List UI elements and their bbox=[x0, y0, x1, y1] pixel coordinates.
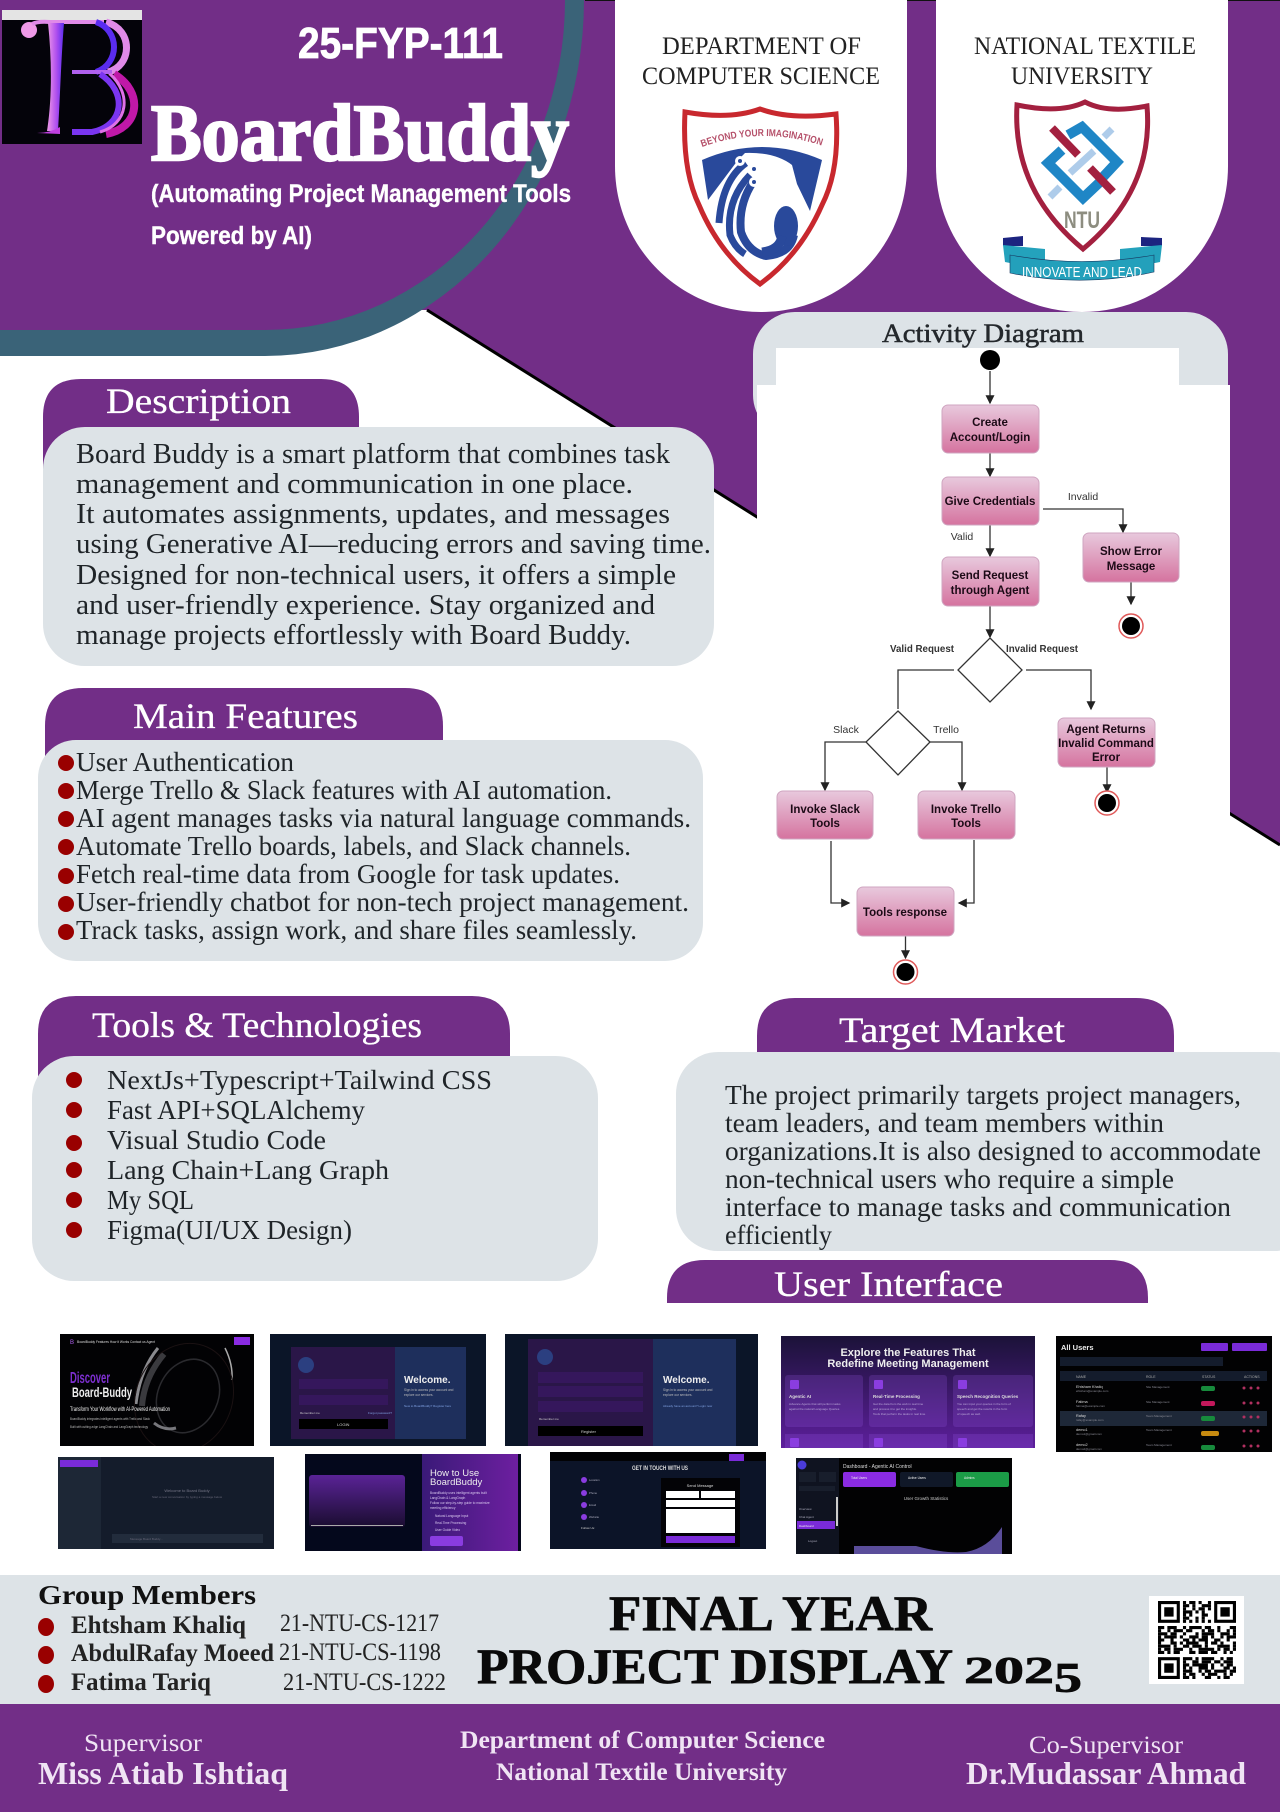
feature list bbox=[76, 747, 691, 945]
panel: university crest arch bbox=[936, 0, 1228, 312]
screenshot: dashboard: Active Users bbox=[908, 1476, 926, 1480]
screenshot: users table: NAME bbox=[1076, 1375, 1087, 1379]
box: show error: Show Error bbox=[1100, 546, 1163, 558]
screenshot: users table: All Users bbox=[1061, 1343, 1094, 1352]
screenshot: users table: Site Management bbox=[1146, 1385, 1170, 1389]
member names: Fatima Tariq bbox=[71, 1669, 211, 1696]
band: group members and display title bbox=[0, 1575, 1280, 1704]
feature list: User Authentication bbox=[76, 747, 294, 777]
screenshot: contact page: GET IN TOUCH WITH US bbox=[632, 1466, 688, 1472]
feature list: Track tasks, assign work, and share files seamlessly. bbox=[76, 915, 637, 945]
description text: Board Buddy is a smart platform that combines task bbox=[76, 438, 670, 470]
feature list: Automate Trello boards, labels, and Slack channels. bbox=[76, 831, 631, 861]
box: show error bbox=[1083, 533, 1179, 582]
screenshot: login page: Remember me bbox=[300, 1411, 320, 1415]
screenshot: login page: LOGIN bbox=[337, 1422, 350, 1427]
header background: purple diagonal shape bbox=[0, 0, 1280, 845]
description text: using Generative AI—reducing errors and saving time. bbox=[76, 528, 711, 560]
screenshot: dashboard bbox=[796, 1458, 1012, 1554]
screenshot: login page bbox=[270, 1334, 486, 1446]
screenshot: users table: demo2@gmail.com bbox=[1076, 1447, 1102, 1451]
icon: NTU shield and ribbon: INNOVATE AND LEAD bbox=[1022, 264, 1142, 281]
screenshot: features page: speech and get the results in the form bbox=[957, 1407, 1008, 1411]
screenshot: features page: against the natural Language Queries. bbox=[789, 1407, 840, 1411]
screenshot: how-to page: How to Use bbox=[430, 1468, 479, 1479]
screenshot: features page: Tools that perform the tasks in real time bbox=[873, 1412, 926, 1416]
decision: tool bbox=[866, 711, 930, 775]
decision: request bbox=[958, 638, 1022, 702]
supervisor bbox=[38, 1730, 288, 1791]
co-supervisor bbox=[966, 1732, 1246, 1791]
screenshot: how-to page: Natural Language Input bbox=[435, 1514, 468, 1518]
panel: user interface heading tab bbox=[667, 1260, 1148, 1304]
university heading: NATIONAL TEXTILE bbox=[974, 33, 1196, 60]
heading: main features: Main Features bbox=[133, 696, 358, 736]
department and university bbox=[460, 1727, 825, 1786]
department and university: Department of Computer Science bbox=[460, 1727, 825, 1754]
screenshot: users table: rafay@example.com bbox=[1076, 1418, 1104, 1422]
screenshot: register page: Sign in to access your account and bbox=[663, 1388, 713, 1392]
box: invoke slack bbox=[777, 791, 873, 839]
panel: department crest arch bbox=[615, 0, 907, 312]
member ids: 21-NTU-CS-1217 bbox=[280, 1610, 439, 1637]
screenshot: users table: Rafay bbox=[1076, 1414, 1086, 1418]
branch labels bbox=[833, 491, 1098, 736]
branch labels: Invalid bbox=[1068, 491, 1098, 503]
screenshot: register page: explore our services. bbox=[663, 1393, 693, 1397]
supervisor: Supervisor bbox=[84, 1730, 203, 1757]
tools list: Fast API+SQLAlchemy bbox=[107, 1095, 365, 1125]
tools bullets bbox=[66, 1072, 82, 1238]
screenshot: landing page: BoardBuddy integrates intelligent agents with Trello and Slack bbox=[70, 1416, 150, 1421]
description text: Designed for non-technical users, it offers a simple bbox=[76, 559, 676, 591]
screenshot: features page: and process it to get the insights. bbox=[873, 1407, 917, 1411]
screenshot: dashboard: Dashboard - Agentic AI Control bbox=[843, 1464, 912, 1470]
description text: and user-friendly experience. Stay organized and bbox=[76, 589, 656, 621]
screenshot: dashboard: Dashboard bbox=[799, 1524, 814, 1528]
member ids: 21-NTU-CS-1198 bbox=[279, 1639, 441, 1666]
branch labels: Slack bbox=[833, 724, 860, 736]
subtitle bbox=[151, 180, 571, 250]
co-supervisor: Dr.Mudassar Ahmad bbox=[966, 1755, 1246, 1791]
target market text: organizations.It is also designed to accommodate bbox=[725, 1136, 1261, 1166]
box: create account bbox=[942, 405, 1039, 453]
box: agent returns bbox=[1058, 718, 1155, 767]
heading: description: Description bbox=[106, 381, 291, 421]
branch labels: Valid Request bbox=[890, 643, 954, 655]
screenshot: dashboard: Overview bbox=[799, 1507, 812, 1511]
start node bbox=[980, 350, 1000, 370]
heading: target market: Target Market bbox=[839, 1010, 1065, 1050]
screenshot: features page: Advance Agents that will perform tasks bbox=[789, 1402, 841, 1406]
box: tools response: Tools response bbox=[863, 907, 947, 919]
panel: description bbox=[43, 379, 714, 666]
box: invoke slack: Invoke Slack bbox=[790, 804, 860, 816]
screenshot: landing page: B bbox=[70, 1340, 74, 1346]
screenshot: users table: demo1 bbox=[1076, 1428, 1088, 1432]
box: invoke trello: Tools bbox=[951, 818, 981, 830]
screenshot: users table: Team Management bbox=[1146, 1428, 1172, 1432]
box: invoke slack: Tools bbox=[810, 818, 840, 830]
screenshot: how-to page: Real-Time Processing bbox=[435, 1521, 466, 1525]
screenshot: register page: Already have an account? Login now bbox=[663, 1404, 713, 1408]
screenshot: contact page: Location bbox=[589, 1478, 600, 1482]
box: create account: Create bbox=[972, 417, 1008, 429]
description text: manage projects effortlessly with Board Buddy. bbox=[76, 619, 631, 651]
screenshot: contact page: Phone bbox=[589, 1491, 598, 1495]
title: final year project display: 202 bbox=[964, 1650, 1054, 1692]
description text: management and communication in one place. bbox=[76, 468, 633, 500]
screenshot: landing page: Discover bbox=[70, 1370, 110, 1387]
screenshot: users table: ROLE bbox=[1146, 1375, 1156, 1379]
box: invoke trello: Invoke Trello bbox=[931, 804, 1001, 816]
project code: 25-FYP-111 bbox=[298, 19, 503, 68]
member ids bbox=[279, 1610, 446, 1696]
screenshot: dashboard: Total Users bbox=[851, 1476, 867, 1480]
box: agent returns: Error bbox=[1092, 752, 1121, 764]
panel: tools and technologies bbox=[32, 996, 598, 1281]
box: send request: through Agent bbox=[951, 585, 1030, 597]
screenshot: chat page: Start a new conversation by typing a message below bbox=[152, 1495, 223, 1499]
tools list: Visual Studio Code bbox=[107, 1125, 326, 1155]
tools list: My SQL bbox=[107, 1185, 194, 1215]
title: final year project display: 5 bbox=[1054, 1656, 1082, 1702]
screenshot: landing page: BoardBuddy Features How it Works Contact us Agent bbox=[77, 1340, 155, 1344]
screenshot: features page: Get the data from the web in real time bbox=[873, 1402, 924, 1406]
tools list: NextJs+Typescript+Tailwind CSS bbox=[107, 1065, 492, 1095]
heading: group members: Group Members bbox=[38, 1580, 256, 1610]
screenshot: landing page: Board-Buddy bbox=[72, 1384, 132, 1400]
screenshot: users table: Team Management bbox=[1146, 1443, 1172, 1447]
screenshot: features page: Agentic AI bbox=[789, 1394, 811, 1399]
screenshot: users table: demo1@gmail.com bbox=[1076, 1432, 1102, 1436]
member bullets bbox=[38, 1618, 54, 1693]
box: invoke trello bbox=[918, 791, 1015, 839]
screenshot: features page: Real-Time Processing bbox=[873, 1394, 920, 1399]
band: footer supervisors and department bbox=[0, 1704, 1280, 1812]
screenshot: contact page: Follow Us: bbox=[581, 1526, 595, 1530]
target market text: non-technical users who require a simple bbox=[725, 1164, 1174, 1194]
tools list: Lang Chain+Lang Graph bbox=[107, 1155, 390, 1185]
screenshot: register page bbox=[505, 1334, 758, 1446]
box: send request: Send Request bbox=[952, 570, 1029, 582]
member names: AbdulRafay Moeed bbox=[71, 1640, 274, 1667]
feature list: User-friendly chatbot for non-tech project management. bbox=[76, 887, 689, 917]
screenshot: landing page bbox=[60, 1334, 254, 1446]
panel: target market bbox=[676, 998, 1280, 1251]
screenshot: how-to page: User Guide Video bbox=[435, 1528, 460, 1532]
panel: user interface heading tab: User Interface bbox=[774, 1264, 1003, 1304]
title: BoardBuddy: BoardBuddy bbox=[151, 90, 569, 178]
heading: activity diagram: Activity Diagram bbox=[882, 319, 1084, 348]
screenshot: users table: ehtsham@example.com bbox=[1076, 1389, 1109, 1393]
screenshot: how-to page: Follow our step-by-step guide to maximize bbox=[430, 1501, 490, 1505]
screenshot: dashboard: User Growth Statistics bbox=[904, 1496, 949, 1501]
screenshot: how-to page: BoardBuddy bbox=[430, 1477, 483, 1488]
end node: tools response bbox=[894, 960, 918, 984]
member names: Ehtsham Khaliq bbox=[71, 1612, 246, 1639]
department and university: National Textile University bbox=[496, 1759, 788, 1786]
end node: error bbox=[1119, 614, 1143, 638]
screenshot: register page: Remember me bbox=[539, 1417, 559, 1421]
description text: It automates assignments, updates, and messages bbox=[76, 498, 670, 530]
diagram connectors bbox=[825, 371, 1131, 958]
screenshot: how-to page bbox=[305, 1454, 521, 1551]
screenshot: chat page: Welcome to Board Buddy bbox=[164, 1488, 210, 1493]
screenshot: login page: Sign in to access your account and bbox=[404, 1388, 454, 1392]
screenshot: contact page: Send Message bbox=[687, 1483, 714, 1488]
screenshot: chat page: Message Board Buddy... bbox=[130, 1537, 163, 1541]
subtitle: (Automating Project Management Tools bbox=[151, 180, 571, 208]
box: create account: Account/Login bbox=[950, 432, 1030, 444]
screenshot: users table bbox=[1056, 1336, 1272, 1452]
icon: NTU shield and ribbon: NTU bbox=[1064, 207, 1100, 234]
screenshot: register page: Register bbox=[581, 1429, 597, 1434]
screenshot: landing page: Built with cutting-edge LangChain and LangGraph technology bbox=[70, 1424, 148, 1429]
icon: computer science shield: BEYOND YOUR IMAGINATION bbox=[700, 129, 824, 147]
end node: invalid command bbox=[1095, 791, 1119, 815]
feature list: Fetch real-time data from Google for task updates. bbox=[76, 859, 620, 889]
title: final year project display bbox=[477, 1585, 1082, 1702]
screenshot: users table: Team Management bbox=[1146, 1414, 1172, 1418]
screenshot: features page: of speech as well. bbox=[957, 1412, 981, 1416]
heading: tools and technologies: Tools & Technologies bbox=[92, 1005, 422, 1045]
screenshot: login page: New to BoardBuddy? Register here bbox=[404, 1404, 452, 1408]
screenshot: register page: Welcome. bbox=[663, 1375, 710, 1386]
screenshot: users table: demo2 bbox=[1076, 1443, 1088, 1447]
feature bullets bbox=[58, 755, 74, 940]
target market text bbox=[725, 1080, 1261, 1250]
description text bbox=[76, 438, 711, 651]
logo: BoardBuddy monogram bbox=[2, 10, 142, 144]
tools list: Figma(UI/UX Design) bbox=[107, 1215, 352, 1245]
title: final year project display: FINAL YEAR bbox=[609, 1585, 933, 1641]
icon: NTU shield and ribbon bbox=[1003, 102, 1162, 281]
screenshot: users table: Site Management bbox=[1146, 1400, 1170, 1404]
screenshot: users table: Ehtsham Khaliq bbox=[1076, 1385, 1103, 1389]
branch labels: Trello bbox=[933, 724, 959, 736]
screenshot: contact page: Email bbox=[589, 1503, 596, 1507]
screenshot: dashboard: Logout bbox=[808, 1539, 817, 1543]
department heading: DEPARTMENT OF bbox=[662, 33, 861, 60]
university heading bbox=[974, 33, 1196, 90]
screenshot: users table: ACTIONS bbox=[1244, 1375, 1260, 1379]
target market text: The project primarily targets project managers, bbox=[725, 1080, 1241, 1110]
tools list bbox=[107, 1065, 492, 1245]
box: give credentials bbox=[942, 477, 1039, 525]
target market text: team leaders, and team members within bbox=[725, 1108, 1165, 1138]
box: give credentials: Give Credentials bbox=[945, 496, 1035, 508]
screenshot: dashboard: Chat Agent bbox=[799, 1515, 814, 1519]
branch labels: Valid bbox=[951, 531, 973, 543]
feature list: AI agent manages tasks via natural language commands. bbox=[76, 803, 691, 833]
screenshot: contact page: Website bbox=[589, 1515, 599, 1519]
supervisor: Miss Atiab Ishtiaq bbox=[38, 1755, 288, 1791]
box: agent returns: Invalid Command bbox=[1058, 738, 1154, 750]
box: tools response bbox=[857, 887, 954, 936]
department heading bbox=[642, 33, 880, 90]
screenshot: login page: explore our services. bbox=[404, 1393, 434, 1397]
department heading: COMPUTER SCIENCE bbox=[642, 63, 880, 90]
screenshot: how-to page: BoardBuddy uses intelligent agents built bbox=[430, 1491, 487, 1495]
screenshot: how-to page: meeting efficiency bbox=[430, 1506, 456, 1510]
title: final year project display: PROJECT DISPLAY bbox=[477, 1638, 953, 1694]
header teal-rimmed quarter disc bbox=[0, 0, 584, 356]
screenshot: features page bbox=[781, 1336, 1035, 1448]
member names bbox=[71, 1612, 274, 1696]
subtitle: Powered by AI) bbox=[151, 222, 312, 250]
screenshot: how-to page: LangChain & LangGraph bbox=[430, 1496, 465, 1500]
screenshot: features page: Speech Recognition Queries bbox=[957, 1394, 1019, 1399]
screenshot: features page: Redefine Meeting Management bbox=[827, 1358, 989, 1370]
feature list: Merge Trello & Slack features with AI automation. bbox=[76, 775, 612, 805]
box: show error: Message bbox=[1107, 561, 1155, 573]
box: agent returns: Agent Returns bbox=[1066, 724, 1146, 736]
icon: QR code bbox=[1149, 1596, 1244, 1684]
screenshot: dashboard: Admins bbox=[964, 1476, 975, 1480]
target market text: efficiently bbox=[725, 1220, 832, 1250]
target market text: interface to manage tasks and communication bbox=[725, 1192, 1232, 1222]
box: send request bbox=[942, 557, 1039, 606]
screenshot: users table: Fatima bbox=[1076, 1400, 1088, 1404]
panel: activity diagram bbox=[753, 312, 1230, 1015]
screenshot: chat page bbox=[58, 1457, 274, 1549]
screenshot: landing page: Transform Your Workflow with AI-Powered Automation bbox=[70, 1407, 170, 1413]
university heading: UNIVERSITY bbox=[1011, 63, 1153, 90]
screenshot: users table: fatima@example.com bbox=[1076, 1404, 1106, 1408]
branch labels: Invalid Request bbox=[1006, 643, 1078, 655]
panel: main features bbox=[38, 688, 703, 961]
screenshot: contact page bbox=[550, 1452, 766, 1549]
screenshot: login page: Forgot password? bbox=[368, 1411, 392, 1415]
screenshot: features page: Explore the Features That bbox=[840, 1347, 976, 1359]
screenshot: users table: STATUS bbox=[1202, 1375, 1216, 1379]
icon: computer science shield bbox=[682, 106, 840, 288]
member ids: 21-NTU-CS-1222 bbox=[283, 1669, 446, 1696]
screenshot: features page: You can input your queries in the form of bbox=[957, 1402, 1011, 1406]
co-supervisor: Co-Supervisor bbox=[1029, 1732, 1184, 1759]
screenshot: login page: Welcome. bbox=[404, 1375, 451, 1386]
